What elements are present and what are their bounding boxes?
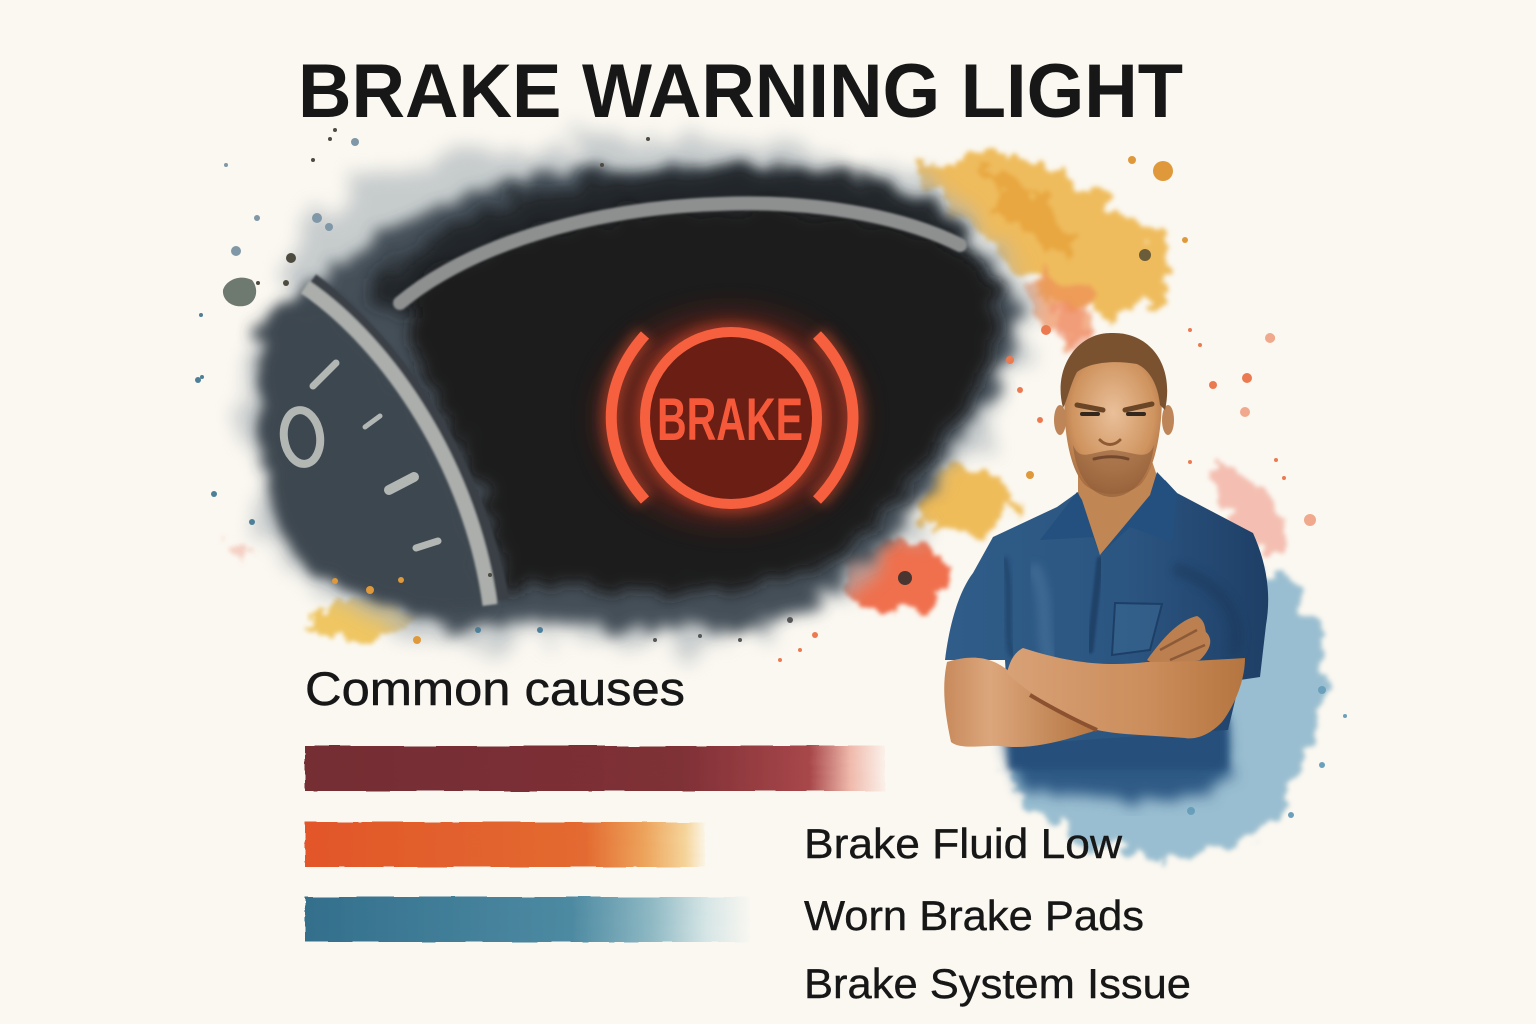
shirt hem wash: [1006, 720, 1230, 800]
arm shadows: [1030, 695, 1097, 730]
label: worn brake pads: Worn Brake Pads: [804, 892, 1144, 939]
hair: [1061, 333, 1167, 410]
crossed arms: [944, 616, 1245, 747]
illustration: yellow watercolor splash: [305, 153, 1166, 639]
label: brake system issue: Brake System Issue: [804, 960, 1191, 1007]
shirt torso: [945, 480, 1268, 745]
ears: [1054, 405, 1174, 435]
hand: [1147, 616, 1210, 668]
shirt folds: [1005, 560, 1236, 660]
bar: brake system issue: [305, 897, 750, 942]
lower arm: [944, 658, 1097, 747]
heading: common causes: Common causes: [305, 662, 685, 715]
upper gauge arc: [400, 203, 960, 303]
bar: brake fluid low: [305, 746, 885, 791]
speedometer zero and ticks: [280, 363, 438, 548]
brake label: BRAKE: [657, 386, 803, 453]
paint splatter dots: [195, 128, 1347, 818]
facial features: [1077, 404, 1152, 459]
shirt lower body: [1008, 715, 1228, 770]
gauge face: [258, 300, 488, 613]
outer pale wash: [245, 142, 1036, 644]
bar: worn brake pads: [305, 822, 705, 867]
band above gauge arc: [360, 169, 990, 320]
illustration: dashboard watercolor panel: [245, 142, 1036, 644]
brake warning symbol: [600, 313, 860, 523]
mid grey-blue wash: [266, 165, 1018, 630]
stubble: [1073, 445, 1154, 497]
neck: [1078, 455, 1165, 555]
collar: [1040, 472, 1177, 555]
title: BRAKE WARNING LIGHT: [298, 49, 1183, 134]
dark dial interior: [405, 208, 999, 590]
illustration: red and blue washes: [225, 300, 1324, 860]
label: brake fluid low: Brake Fluid Low: [804, 820, 1123, 867]
speedometer rim: [305, 280, 502, 605]
illustration: mechanic with crossed arms: [944, 333, 1268, 800]
head: [1064, 359, 1162, 494]
upper forearm: [1007, 648, 1245, 738]
